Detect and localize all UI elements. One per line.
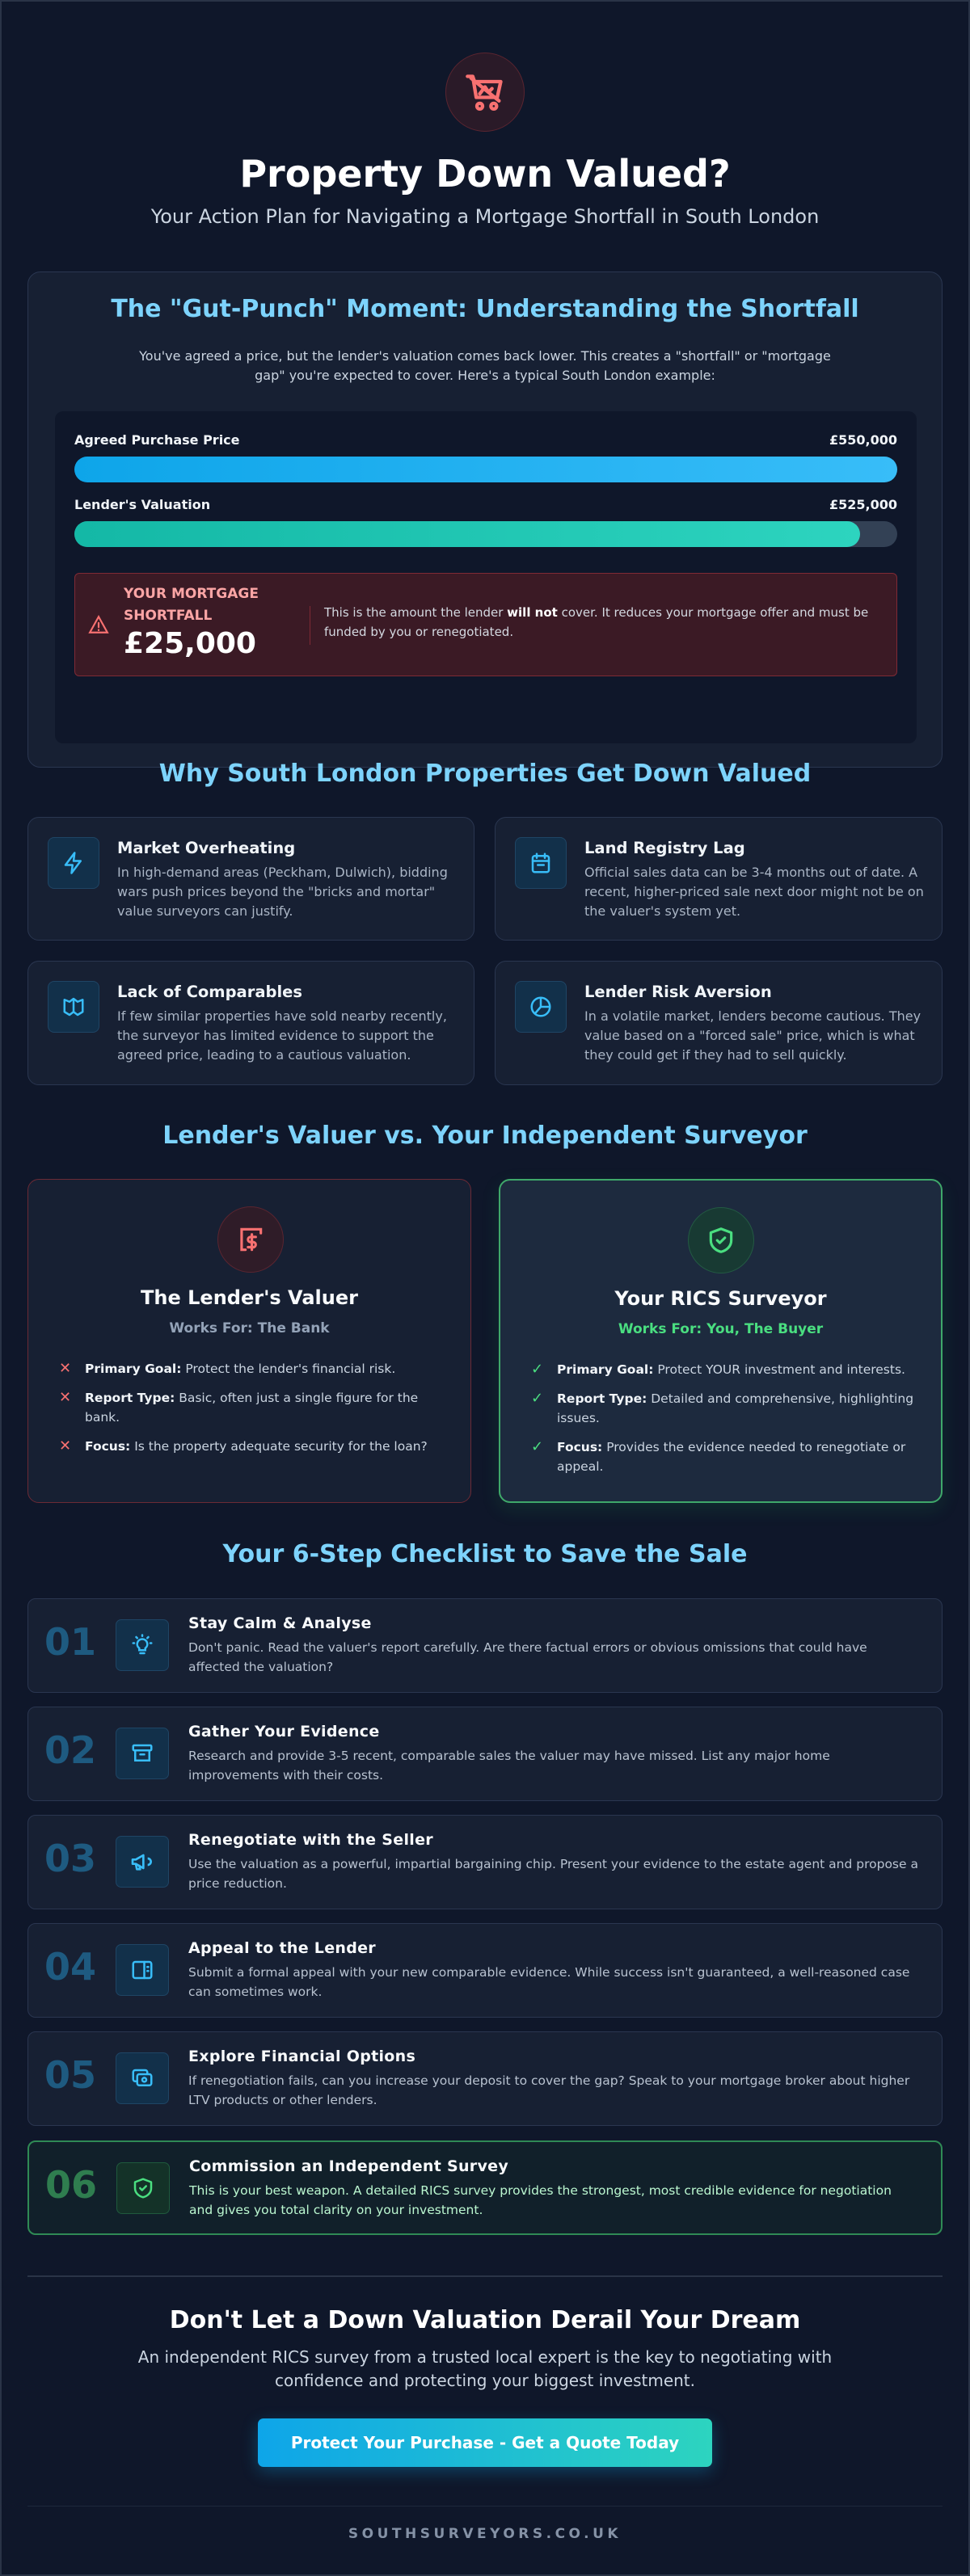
- panel: lender's valuer: ✕: [59, 1389, 71, 1406]
- callout: shortfall: [74, 573, 897, 676]
- card: lender risk aversion: In a volatile market, lenders become cautious. They value based on a "forced sale" price, which is what they could get if they had to sell quickly.: [584, 1008, 921, 1063]
- icon: pie: [515, 981, 567, 1033]
- step 03: [27, 1815, 943, 1909]
- panel: RICS surveyor: Focus: Provides the evidence needed to renegotiate or appeal.: [557, 1440, 905, 1474]
- step 02: Research and provide 3-5 recent, comparable sales the valuer may have missed. List any major home improvements with their costs.: [188, 1749, 830, 1783]
- panel: RICS surveyor: Report Type: Detailed and comprehensive, highlighting issues.: [557, 1391, 913, 1425]
- callout: shortfall: £25,000: [124, 627, 256, 660]
- text: final call: An independent RICS survey from a trusted local expert is the key to negotiating with confidence and protecting your biggest investment.: [138, 2347, 832, 2390]
- label: valuation: [74, 497, 897, 512]
- step 06: This is your best weapon. A detailed RICS survey provides the strongest, most credible evidence for negotiation and gives you total clarity on your investment.: [189, 2183, 892, 2217]
- panel: lender's valuer: ✕: [59, 1360, 71, 1377]
- panel: RICS surveyor: Works For: You, The Buyer: [618, 1321, 823, 1337]
- heading: checklist: Your 6-Step Checklist to Save the Sale: [223, 1540, 747, 1568]
- icon: archive: [116, 1728, 169, 1779]
- card: land registry lag: Land Registry Lag: [584, 839, 745, 857]
- label: shortfall amount: [123, 586, 259, 624]
- list: lender points: Primary Goal: Protect the lender's financial risk.: [85, 1362, 395, 1376]
- card: market overheating: In high-demand areas (Peckham, Dulwich), bidding wars push prices beyond the "bricks and mortar" value surveyors can justify.: [117, 865, 448, 919]
- bar: valuation: [74, 521, 897, 547]
- icon: bulb: [116, 1619, 169, 1671]
- icon: cash: [116, 2052, 169, 2104]
- step 05: [27, 2031, 943, 2126]
- step 06: [27, 2140, 943, 2235]
- card: land registry lag: [495, 817, 943, 941]
- icon: document: [116, 1944, 169, 1996]
- subtitle: Your Action Plan for Navigating a Mortgage Shortfall in South London: [151, 205, 819, 228]
- step 01: 01: [44, 1620, 96, 1664]
- label: agreed price: £550,000: [829, 432, 897, 448]
- text: shortfall explanation: This is the amount the lender will not cover. It reduces your mortgage offer and must be funded by you or renegotiated.: [324, 605, 868, 639]
- panel: lender's valuer: [27, 1179, 471, 1503]
- step 06: Commission an Independent Survey: [189, 2157, 508, 2175]
- step 04: Submit a formal appeal with your new comparable evidence. While success isn't guaranteed, a well-reasoned case can sometimes work.: [188, 1965, 909, 1999]
- step 03: Renegotiate with the Seller: [188, 1831, 433, 1849]
- step 05: If renegotiation fails, can you increase your deposit to cover the gap? Speak to your mortgage broker about higher LTV products or other lenders.: [188, 2073, 909, 2107]
- icon: book: [48, 981, 99, 1033]
- panel: lender's valuer: ✕: [59, 1437, 71, 1454]
- step 01: [27, 1598, 943, 1693]
- heading: why down valued: Why South London Properties Get Down Valued: [159, 760, 811, 788]
- footer: SOUTHSURVEYORS.CO.UK: [348, 2526, 622, 2542]
- step 04: [27, 1923, 943, 2018]
- step 06: 06: [45, 2163, 97, 2207]
- panel: RICS surveyor: ✓: [531, 1438, 543, 1455]
- card: land registry lag: Official sales data can be 3-4 months out of date. A recent, higher-priced sale next door might not be on the valuer's system yet.: [584, 865, 924, 919]
- icon: shield check: [116, 2162, 170, 2214]
- heading: final call: Don't Let a Down Valuation Derail Your Dream: [170, 2306, 800, 2334]
- label: valuation: Lender's Valuation: [74, 497, 210, 512]
- panel: lender's valuer: Focus: Is the property adequate security for the loan?: [85, 1439, 428, 1454]
- label: valuation: £525,000: [829, 497, 897, 512]
- step 02: 02: [44, 1728, 96, 1772]
- card: lack of comparables: If few similar properties have sold nearby recently, the surveyor has limited evidence to support the agreed price, leading to a cautious valuation.: [117, 1008, 447, 1063]
- icon: megaphone: [116, 1836, 169, 1888]
- button: CTA: [258, 2418, 712, 2467]
- icon: dollar: [217, 1206, 284, 1273]
- panel: RICS surveyor: [499, 1179, 943, 1503]
- card: market overheating: Market Overheating: [117, 839, 295, 857]
- list: surveyor points: Primary Goal: Protect YOUR investment and interests.: [557, 1362, 905, 1377]
- heading: gut-punch: The "Gut-Punch" Moment: Understanding the Shortfall: [111, 295, 859, 323]
- label: shortfall amount: SHORTFALL: [124, 608, 212, 624]
- label: shortfall amount: YOUR MORTGAGE: [124, 586, 259, 602]
- step 01: Don't panic. Read the valuer's report carefully. Are there factual errors or obvious omissions that could have affected the valuation?: [188, 1640, 867, 1674]
- icon: warning: [88, 615, 109, 633]
- step 04: Appeal to the Lender: [188, 1939, 376, 1957]
- card: market overheating: [27, 817, 474, 941]
- step 03: Use the valuation as a powerful, impartial bargaining chip. Present your evidence to the estate agent and propose a price reduction.: [188, 1857, 918, 1891]
- label: agreed price: Agreed Purchase Price: [74, 432, 240, 448]
- panel: RICS surveyor: ✓: [531, 1361, 543, 1378]
- card: lack of comparables: Lack of Comparables: [117, 983, 302, 1001]
- card: lender risk aversion: [495, 961, 943, 1085]
- bar: agreed: [74, 457, 897, 482]
- panel: lender's valuer: Report Type: Basic, often just a single figure for the bank.: [85, 1391, 418, 1425]
- card: lack of comparables: [27, 961, 474, 1085]
- step 01: Stay Calm & Analyse: [188, 1614, 372, 1632]
- panel: RICS surveyor: ✓: [531, 1390, 543, 1407]
- heading: comparison: Lender's Valuer vs. Your Independent Surveyor: [162, 1122, 808, 1150]
- button: CTA: Protect Your Purchase - Get a Quote Today: [291, 2433, 679, 2452]
- panel: RICS surveyor: Your RICS Surveyor: [614, 1287, 827, 1310]
- title: Property Down Valued?: [239, 152, 731, 196]
- panel: shortfall: [27, 271, 943, 768]
- step 04: 04: [44, 1945, 96, 1989]
- intro text: You've agreed a price, but the lender's valuation comes back lower. This creates a "shortfall" or "mortgage gap" you're expected to cover. Here's a typical South London example:: [139, 348, 831, 383]
- step 03: 03: [44, 1837, 96, 1880]
- icon: calendar: [515, 837, 567, 889]
- step 05: Explore Financial Options: [188, 2048, 415, 2065]
- panel: lender's valuer: Works For: The Bank: [169, 1320, 330, 1336]
- chart: price vs valuation: [55, 411, 917, 743]
- step 02: Gather Your Evidence: [188, 1723, 380, 1740]
- step 02: [27, 1707, 943, 1801]
- panel: lender's valuer: The Lender's Valuer: [141, 1286, 358, 1309]
- step 05: 05: [44, 2053, 96, 2097]
- icon: lightning: [48, 837, 99, 889]
- label: agreed price: [74, 432, 897, 448]
- card: lender risk aversion: Lender Risk Aversion: [584, 983, 772, 1001]
- icon: shield check: [688, 1207, 754, 1273]
- icon: header cart: [445, 53, 525, 132]
